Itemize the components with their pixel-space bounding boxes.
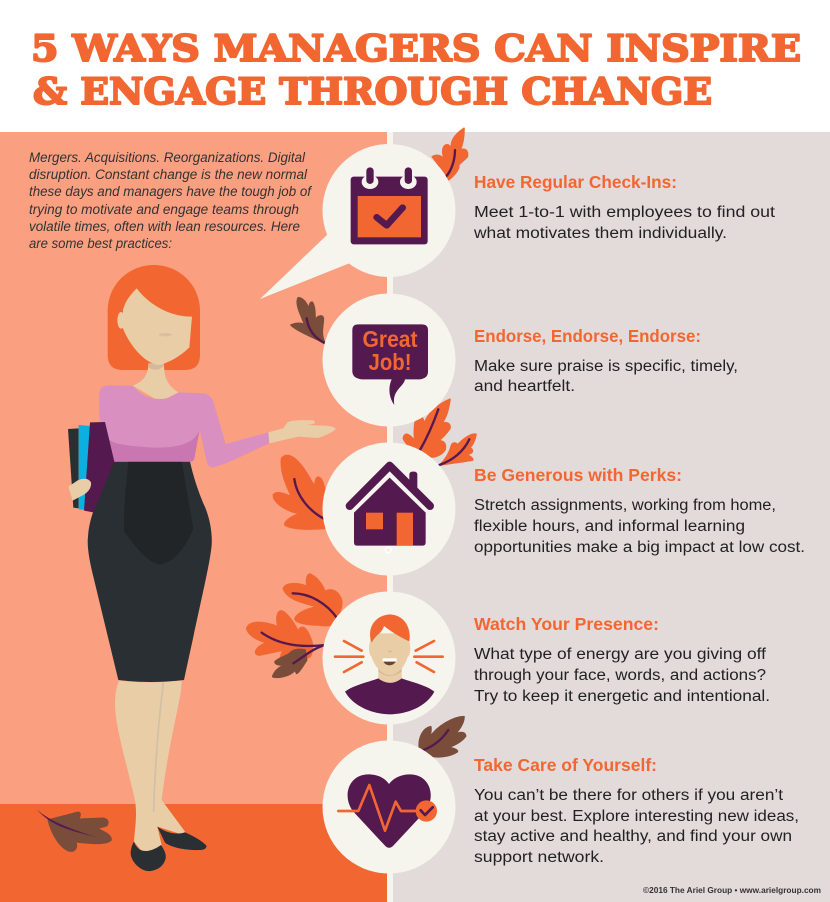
- leaf: orange upper left of circle four: [283, 574, 342, 626]
- intro paragraph: Mergers. Acquisitions. Reorganizations. Digital: [29, 150, 306, 165]
- legs and shoes: [115, 681, 207, 871]
- leaf: top right orange: [432, 128, 468, 180]
- body text: support network.: [474, 849, 604, 866]
- icon: Great Job speech bubble: Job!: [368, 349, 412, 375]
- torso, head and arm: [99, 265, 336, 467]
- intro paragraph: trying to motivate and engage teams through: [29, 202, 299, 217]
- circle five: [322, 740, 456, 874]
- body text: You can’t be there for others if you aren’t: [474, 787, 784, 804]
- timeline: connector spine: [387, 132, 393, 902]
- leaf: brown on the floor: [37, 809, 111, 851]
- speech bubble tail: [260, 234, 350, 299]
- skirt centre panel: [124, 462, 193, 564]
- body text: and heartfelt.: [474, 378, 575, 395]
- body text: through your face, words, and actions?: [474, 667, 766, 684]
- intro paragraph: volatile times, often with lean resources. Here: [29, 219, 300, 234]
- circle four: [322, 592, 456, 724]
- leaf: big orange left of circle three: [273, 455, 327, 529]
- circle two: [322, 294, 456, 426]
- skirt: [88, 462, 212, 682]
- body text: [474, 646, 770, 705]
- title: & ENGAGE THROUGH CHANGE: [33, 71, 712, 113]
- background: left peach panel: [0, 132, 388, 804]
- body text: what motivates them individually.: [473, 225, 727, 242]
- intro paragraph: disruption. Constant change is the new normal: [29, 167, 308, 182]
- heading: Be Generous with Perks:: [474, 465, 682, 485]
- leaf: orange lower left of circle four: [247, 611, 325, 661]
- heading: Have Regular Check-Ins:: [474, 172, 677, 192]
- icon: smiling person with energy lines: [335, 614, 443, 714]
- background: white header band: [0, 0, 830, 132]
- body text: Try to keep it energetic and intentional.: [474, 688, 770, 705]
- heading: Watch Your Presence:: [474, 614, 659, 634]
- body text: at your best. Explore interesting new ideas,: [474, 808, 799, 825]
- intro paragraph: [29, 150, 312, 251]
- circle one: [322, 144, 456, 277]
- background: right grey panel: [392, 132, 830, 902]
- leaf: brown left of circle four: [273, 645, 325, 677]
- body text: [474, 787, 799, 866]
- circle three: [322, 442, 456, 576]
- heading: Endorse, Endorse, Endorse:: [474, 326, 701, 346]
- icon: house: [350, 466, 430, 553]
- leaf: brown above circle five: [419, 717, 466, 757]
- books under arm: [68, 422, 114, 512]
- icon: calendar with check: [351, 167, 428, 244]
- item 5: Take Care of Yourself: [474, 755, 799, 866]
- leaves behind the circles: [247, 128, 476, 757]
- item 1: Have Regular Check-Ins: [473, 172, 776, 242]
- icon: Great Job speech bubble: Great: [362, 326, 418, 352]
- body text: opportunities make a big impact at low cost.: [474, 539, 805, 556]
- body text: Meet 1-to-1 with employees to find out: [474, 204, 776, 221]
- body text: What type of energy are you giving off: [474, 646, 767, 663]
- icon: Great Job speech bubble: [352, 324, 428, 405]
- intro paragraph: are some best practices:: [29, 236, 172, 251]
- leaf: small orange above circle three: [439, 434, 476, 465]
- item 3: Be Generous with Perks: [474, 465, 805, 556]
- icon: heart with pulse and check: [338, 774, 437, 848]
- footer credit: ©2016 The Ariel Group • www.arielgroup.com: [643, 886, 821, 895]
- intro paragraph: these days and managers have the tough job of: [29, 184, 312, 199]
- body text: stay active and healthy, and find your own: [474, 828, 792, 845]
- title: 5 WAYS MANAGERS CAN INSPIRE: [31, 28, 801, 70]
- body text: Make sure praise is specific, timely,: [474, 358, 738, 375]
- body text: [474, 358, 738, 395]
- woman figure: [68, 265, 336, 871]
- leaf: large orange above circle three: [403, 399, 450, 457]
- heading: Take Care of Yourself:: [474, 755, 657, 775]
- background: left orange floor: [0, 804, 388, 902]
- body text: Stretch assignments, working from home,: [474, 497, 776, 514]
- title: [31, 28, 801, 113]
- leaf: brown beside circle two: [291, 298, 325, 343]
- item 2: Endorse: [474, 326, 738, 395]
- body text: [473, 204, 776, 242]
- body text: [474, 497, 805, 556]
- item 4: Watch Your Presence: [474, 614, 770, 705]
- body text: flexible hours, and informal learning: [474, 518, 745, 535]
